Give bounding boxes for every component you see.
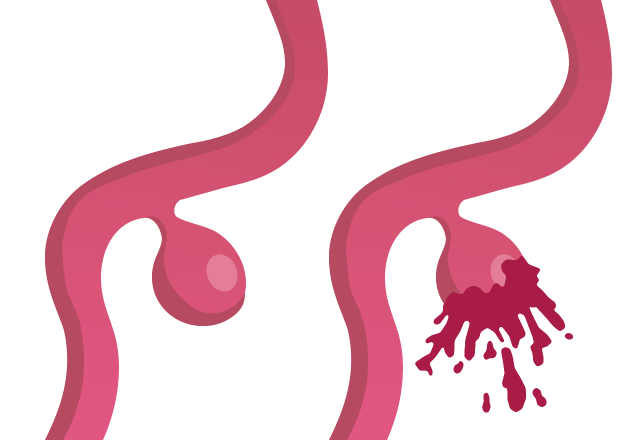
blood splatter bbox=[415, 256, 574, 412]
rupture highlight bbox=[485, 250, 527, 296]
droplets bbox=[454, 361, 463, 373]
ruptured vessel body bbox=[329, 0, 612, 440]
panel: intact aneurysm vessel bbox=[45, 0, 328, 440]
aneurysm highlight bbox=[201, 250, 243, 296]
main splatter body bbox=[415, 256, 565, 375]
panel: ruptured aneurysm vessel bbox=[329, 0, 612, 440]
